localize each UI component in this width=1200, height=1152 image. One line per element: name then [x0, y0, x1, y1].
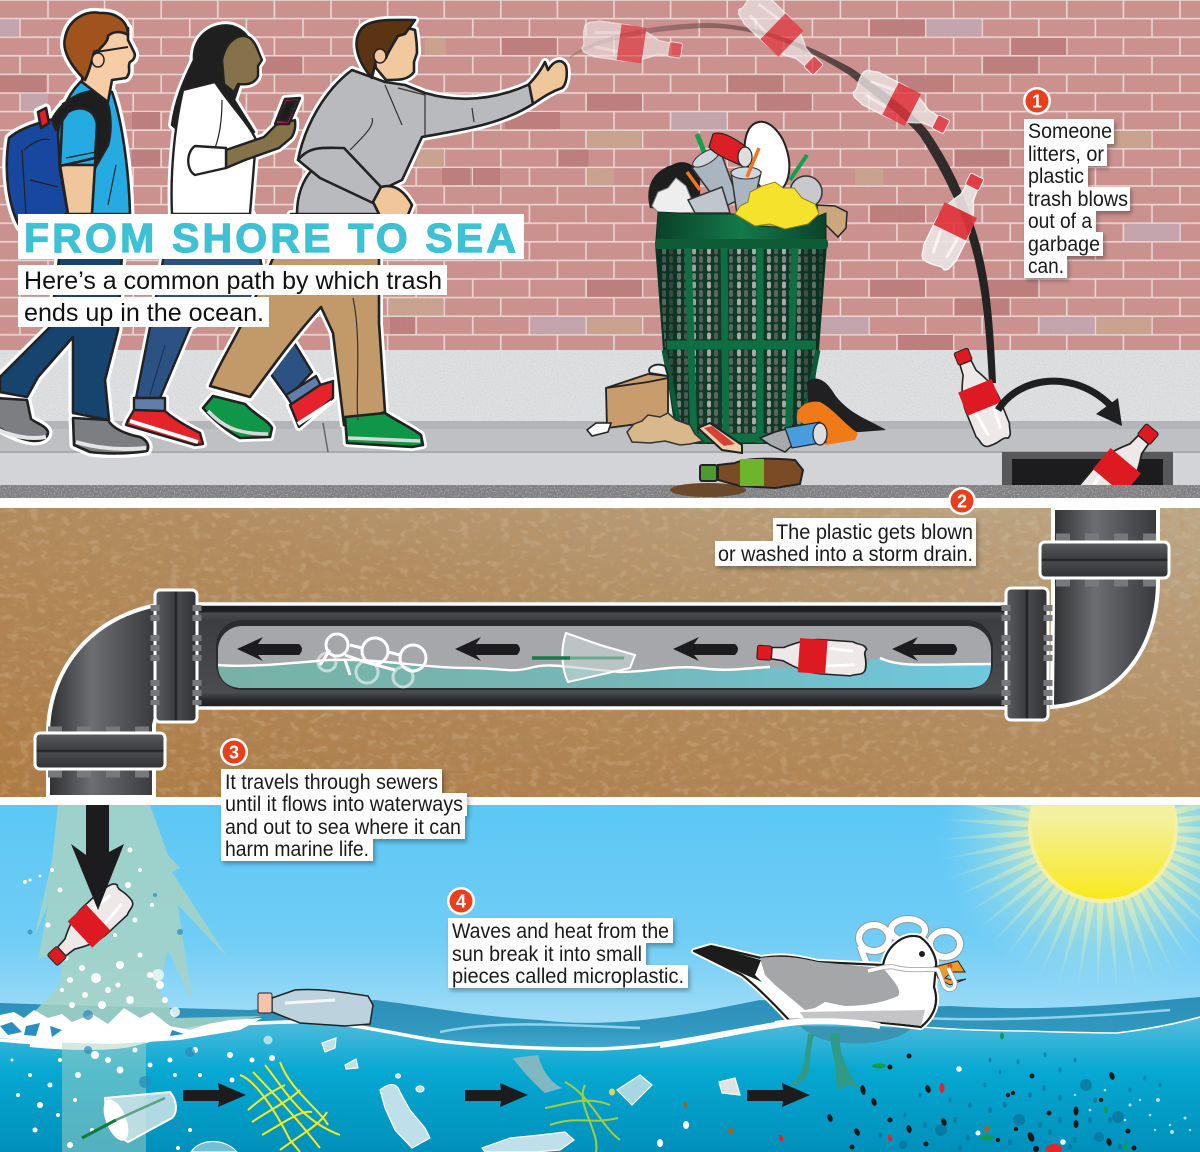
right flange	[1006, 588, 1048, 720]
white divider	[0, 797, 1200, 805]
arrow: sea 1	[183, 1083, 246, 1107]
step 1 text: can.	[1028, 255, 1064, 278]
step 4 text: sun break it into small	[452, 943, 642, 966]
step 3 text: harm marine life.	[225, 838, 369, 861]
sun rays	[943, 805, 1200, 984]
water line	[0, 1017, 1200, 1049]
beak	[934, 961, 966, 985]
body	[694, 936, 936, 1027]
bottle: floating clear	[258, 989, 373, 1026]
bottle: entering drain	[1080, 424, 1159, 485]
step 3 badge	[220, 738, 248, 766]
subtitle: ends up in the ocean.	[24, 299, 264, 327]
trash can with overflowing trash	[648, 117, 847, 443]
grey wing	[760, 957, 899, 1010]
cup 2	[731, 167, 761, 214]
step 4 text: pieces called microplastic.	[452, 965, 684, 988]
teal specks	[878, 1052, 1162, 1151]
step 1 text: garbage	[1028, 233, 1100, 256]
bottle: falling at curb	[944, 344, 1015, 449]
white specks	[1074, 1089, 1191, 1134]
plate	[737, 117, 797, 197]
teal outflow spray	[20, 805, 262, 1040]
pipe window	[216, 620, 993, 690]
surface foam	[0, 1008, 262, 1044]
sewer pipe	[35, 508, 1169, 797]
underwater column	[62, 1040, 146, 1152]
step 1 text: trash blows	[1028, 188, 1128, 211]
microplastic particles	[609, 1032, 1191, 1152]
arrow: out of pipe	[71, 805, 124, 910]
grey ball and straw	[790, 176, 822, 208]
bottle: flying 4	[918, 168, 994, 273]
can body	[655, 239, 828, 443]
sky	[0, 805, 1200, 1030]
tan crumple	[817, 205, 847, 237]
spill	[670, 483, 746, 497]
step 2 text: The plastic gets blown	[776, 521, 973, 544]
bubbles	[10, 848, 275, 1150]
arrow: pipe 4	[892, 637, 957, 661]
brick wall	[0, 0, 1200, 352]
dark garbage bag behind the can	[648, 162, 700, 213]
left elbow	[48, 605, 157, 797]
submerged body	[800, 1026, 912, 1043]
right elbow	[1052, 508, 1158, 707]
horizontal run	[190, 604, 1020, 708]
storm drain	[1002, 452, 1173, 485]
ocean panel	[0, 805, 1200, 1152]
lying cup	[688, 187, 730, 213]
red pieces	[778, 1083, 1062, 1152]
arrow: pipe 2	[455, 637, 520, 661]
step 4 badge: 4	[456, 892, 466, 912]
six-pack rings in pipe	[318, 634, 426, 687]
white crumple	[652, 178, 698, 214]
step 3 text: until it flows into waterways	[225, 793, 463, 816]
step 3 text: and out to sea where it can	[225, 816, 461, 839]
sun	[1028, 805, 1178, 903]
arrow: pipe 3	[673, 637, 738, 661]
yellow fishing net	[240, 1062, 340, 1152]
person: woman with phone	[126, 25, 333, 445]
can rim	[656, 212, 826, 240]
arrow: pipe 1	[237, 637, 302, 661]
clear cup in pipe	[532, 633, 635, 682]
step 1 badge	[1023, 87, 1051, 115]
green straw	[697, 134, 709, 165]
bottle: flying 3	[850, 66, 955, 143]
step 1 text: out of a	[1028, 210, 1092, 233]
neck band of six-pack ring	[868, 967, 955, 989]
sea	[0, 1017, 1200, 1152]
arrow: sea 2	[465, 1083, 528, 1107]
orange straws	[687, 148, 759, 190]
blue can	[785, 422, 827, 448]
white scrap	[587, 423, 611, 436]
tan crumpled paper	[627, 413, 703, 445]
step 3 text: It travels through sewers	[225, 771, 438, 794]
plastic fragments	[191, 1038, 740, 1152]
red can	[709, 133, 752, 167]
step 1 text	[1024, 119, 1130, 278]
person: man throwing bottle	[203, 20, 567, 447]
step 2 text	[715, 518, 976, 566]
six-pack rings behind head	[859, 919, 960, 972]
green pieces	[872, 1032, 1128, 1150]
person: student with backpack	[0, 12, 148, 453]
yellow bag	[735, 182, 819, 229]
black bag	[807, 378, 886, 432]
grey crumple	[760, 428, 798, 452]
back waves	[0, 997, 1200, 1060]
pipe outflow splash	[0, 805, 275, 1152]
cup 1	[690, 145, 738, 208]
bottle: plunging	[40, 879, 137, 974]
bottle in pipe	[756, 635, 868, 677]
arrow: sea 3	[747, 1083, 810, 1107]
subtitle	[18, 265, 447, 327]
cardboard box	[606, 365, 668, 428]
leg left	[790, 1034, 815, 1087]
title: FROM SHORE TO SEA	[24, 215, 516, 261]
ground litter around can	[587, 365, 886, 497]
sun glow	[954, 805, 1200, 970]
step 2 text: or washed into a storm drain.	[718, 543, 973, 566]
step 4 text: Waves and heat from the	[452, 920, 669, 943]
clear cup underwater	[82, 1092, 176, 1144]
step 3 text	[221, 769, 467, 861]
step 1 text: Someone	[1028, 120, 1112, 143]
step 3 badge: 3	[229, 742, 239, 762]
step 4 badge	[447, 887, 475, 915]
arrow: trajectory of the bottle	[570, 23, 996, 383]
left flange	[155, 590, 197, 722]
gull water band	[775, 1021, 880, 1026]
step 1 text: plastic	[1028, 165, 1084, 188]
brown bottle	[700, 459, 803, 488]
step 1 text: litters, or	[1028, 143, 1104, 166]
lower flange	[35, 731, 165, 773]
arrow: into drain	[998, 381, 1122, 426]
brown and yellow pieces	[609, 1088, 990, 1134]
step 2 badge: 2	[957, 492, 967, 512]
subtitle: Here’s a common path by which trash	[24, 267, 442, 295]
step 4 text	[448, 918, 688, 988]
step 2 badge	[948, 487, 976, 515]
lower body shade	[800, 1010, 925, 1026]
bottle: flying 2	[734, 0, 831, 83]
black wingtips	[694, 946, 762, 982]
bottle: flying 1	[581, 19, 684, 69]
leg right	[830, 1033, 863, 1090]
white pieces	[657, 1066, 1066, 1147]
teal ribbon and green net	[513, 1055, 620, 1152]
pizza slice	[698, 423, 742, 453]
soil panel	[0, 508, 1200, 797]
sidewalk	[0, 350, 1200, 498]
step 1 badge: 1	[1032, 92, 1042, 112]
black pieces	[826, 1054, 1136, 1152]
orange bag	[797, 402, 858, 445]
seagull with six-pack ring	[694, 919, 966, 1090]
eye	[919, 951, 925, 957]
upper flange	[1040, 538, 1169, 582]
